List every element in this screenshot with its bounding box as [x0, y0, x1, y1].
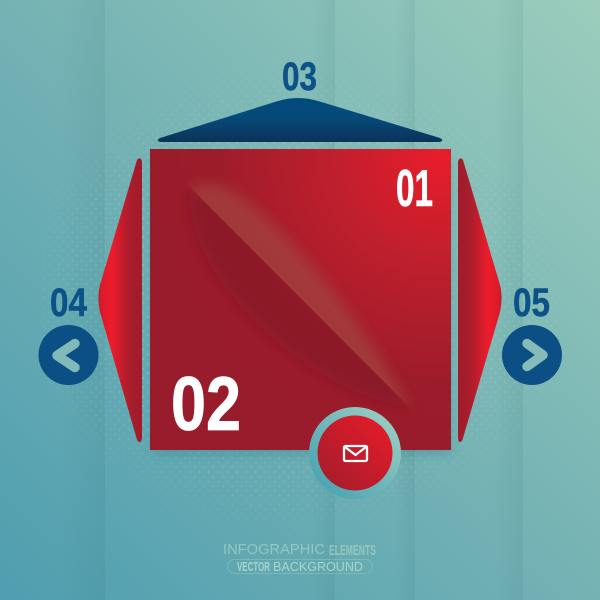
icon: envelope — [344, 446, 367, 461]
footer title: VECTOR — [237, 560, 270, 574]
footer title: INFOGRAPHIC — [223, 542, 325, 558]
number 02: 02 — [171, 362, 241, 447]
diagonal fold highlight — [190, 184, 410, 408]
fold shadow — [190, 187, 410, 408]
number 03: 03 — [282, 55, 317, 99]
left red panel 04 — [98, 158, 142, 442]
footer title: ELEMENTS — [329, 542, 376, 559]
red square panel — [150, 149, 451, 455]
number 04: 04 — [50, 281, 88, 325]
left arrow button — [38, 325, 98, 385]
right red panel 05 — [458, 158, 502, 442]
mail button — [309, 407, 401, 499]
right arrow button — [502, 325, 562, 385]
number 01: 01 — [396, 160, 433, 218]
footer title: BACKGROUND — [273, 559, 363, 574]
number 05: 05 — [513, 281, 550, 325]
footer title — [223, 542, 376, 574]
top navy panel 03 — [158, 98, 442, 142]
